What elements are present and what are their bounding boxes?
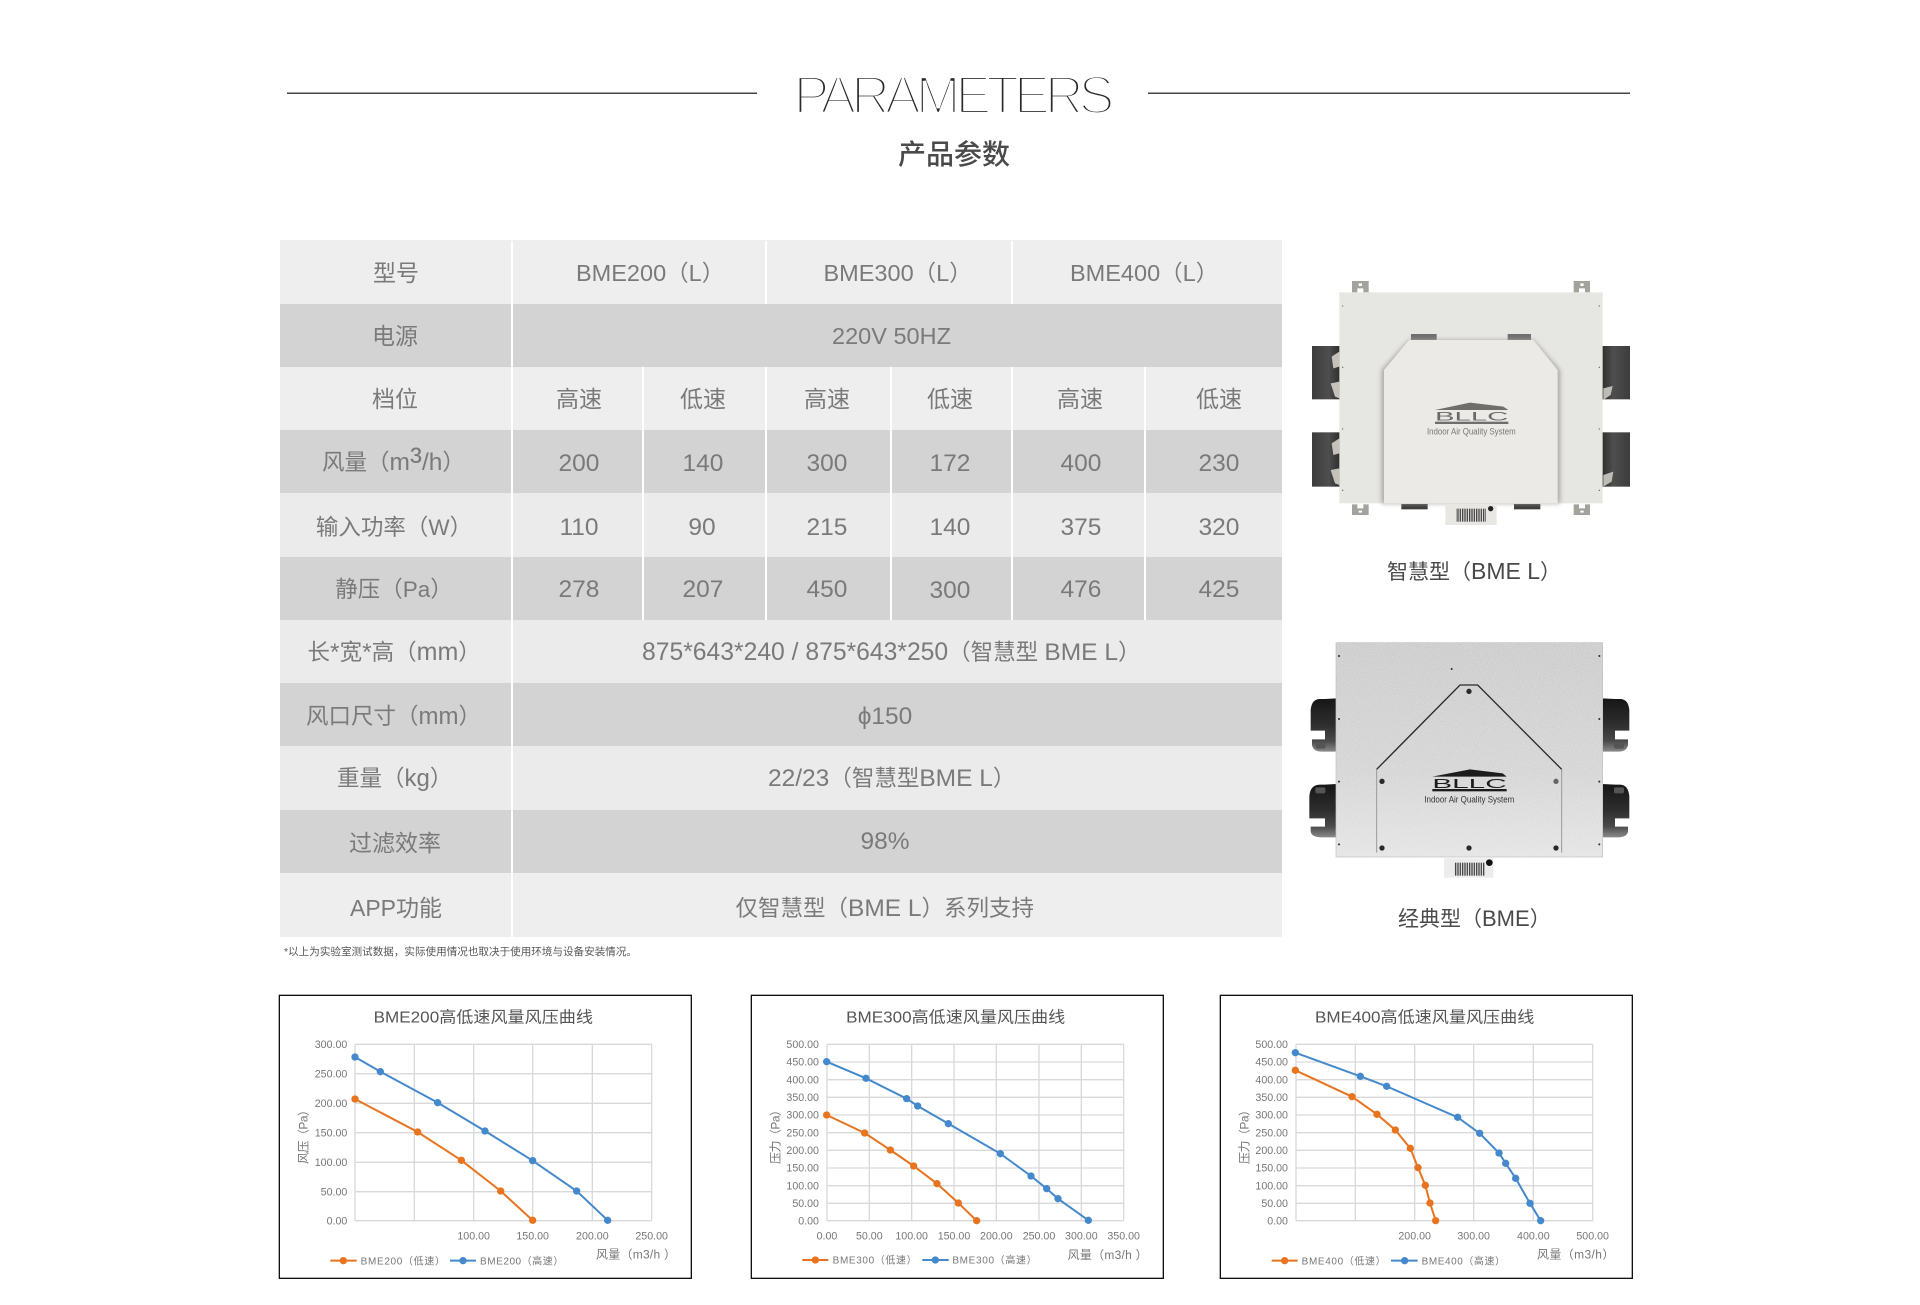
row: speed xyxy=(280,367,1282,430)
front panel xyxy=(1384,340,1558,503)
product image: classic type BME xyxy=(1309,643,1629,878)
y axis labels: 0.00 xyxy=(1267,1215,1288,1227)
x axis labels: 250.00 xyxy=(635,1231,668,1243)
row: dimensions: 875*643*240 / 875*643*250（智慧型 BME L） xyxy=(642,639,1140,666)
row: power: 220V 50HZ xyxy=(832,323,951,349)
y axis title: 风压（Pa） xyxy=(297,1104,311,1164)
row: input power: 110 xyxy=(559,514,599,541)
row: airflow: ） xyxy=(442,450,465,475)
product image: smart type BME L xyxy=(1312,281,1630,525)
x axis labels: 200.00 xyxy=(1398,1231,1431,1243)
y axis labels: 50.00 xyxy=(1261,1198,1288,1210)
row: model: 型号 xyxy=(373,260,419,286)
x axis labels xyxy=(817,1231,1140,1243)
y axis labels: 250.00 xyxy=(315,1068,347,1080)
screws xyxy=(1338,655,1600,851)
frame xyxy=(751,995,1163,1278)
row: airflow: 140 xyxy=(683,450,723,477)
body xyxy=(1339,292,1603,503)
x axis title: 风量（m3/h ） xyxy=(596,1247,676,1261)
logo: BLLC xyxy=(1432,776,1507,791)
row: duct size: 风口尺寸（mm） xyxy=(306,703,481,730)
row: input power: 90 xyxy=(688,514,716,541)
chart: BME200 xyxy=(279,995,691,1278)
subtitle: 产品参数 xyxy=(898,139,1010,170)
row: speed: 高速 xyxy=(1057,386,1103,412)
title rule left xyxy=(287,92,757,94)
legend xyxy=(1272,1254,1505,1267)
row: static pressure: 425 xyxy=(1199,576,1239,603)
row: airflow: ³ xyxy=(410,440,422,481)
legend: BME400（低速） xyxy=(1302,1254,1386,1267)
logo tagline: Indoor Air Quality System xyxy=(1427,427,1516,437)
row: input power: 140 xyxy=(930,514,970,541)
x axis labels: 300.00 xyxy=(1065,1231,1098,1243)
row: input power: 215 xyxy=(807,514,847,541)
chart title: BME300高低速风量风压曲线 xyxy=(846,1008,1065,1026)
row: static pressure: 476 xyxy=(1061,576,1101,603)
y axis labels: 500.00 xyxy=(786,1039,819,1051)
caption: classic type: 经典型（BME） xyxy=(1398,906,1551,931)
row: speed: 高速 xyxy=(804,386,850,412)
legend: BME300（低速） xyxy=(833,1254,917,1267)
y axis labels: 100.00 xyxy=(1255,1180,1288,1192)
x axis labels: 350.00 xyxy=(1107,1231,1140,1243)
series: high speed xyxy=(1292,1049,1544,1224)
body grain xyxy=(1336,643,1603,857)
x axis labels: 150.00 xyxy=(516,1231,549,1243)
x axis labels: 300.00 xyxy=(1457,1231,1490,1243)
x axis labels: 0.00 xyxy=(817,1231,837,1243)
row: speed: 高速 xyxy=(556,386,602,412)
logo xyxy=(1432,769,1507,791)
y axis labels: 300.00 xyxy=(786,1110,819,1122)
logo xyxy=(1435,403,1509,424)
footnote: *以上为实验室测试数据，实际使用情况也取决于使用环境与设备安装情况。 xyxy=(284,945,637,958)
y axis labels: 150.00 xyxy=(1255,1163,1288,1175)
y axis labels: 0.00 xyxy=(798,1215,819,1227)
row: input power: 320 xyxy=(1199,514,1239,541)
series: low speed xyxy=(351,1095,536,1224)
row: airflow: 400 xyxy=(1061,450,1101,477)
panel sides xyxy=(1377,769,1562,853)
y axis title: 压力（Pa） xyxy=(1238,1104,1252,1164)
row: filter efficiency: 过滤效率 xyxy=(349,830,441,856)
ports xyxy=(1312,346,1630,487)
row: static pressure xyxy=(280,557,1282,620)
panel shadow xyxy=(1382,340,1560,503)
y axis labels: 300.00 xyxy=(1255,1110,1288,1122)
x axis labels: 100.00 xyxy=(895,1231,928,1243)
x axis labels: 200.00 xyxy=(980,1231,1013,1243)
x axis labels: 150.00 xyxy=(938,1231,970,1243)
row: input power: 输入功率（W） xyxy=(316,515,472,540)
row: filter efficiency: 98% xyxy=(860,828,910,855)
bottom tabs xyxy=(1401,504,1540,509)
row: duct size: ϕ150 xyxy=(858,703,912,730)
y axis labels: 200.00 xyxy=(315,1098,347,1110)
row: static pressure: 207 xyxy=(683,576,723,603)
rivets xyxy=(1342,305,1600,491)
row: static pressure: 300 xyxy=(930,577,970,604)
grid xyxy=(1296,1044,1593,1221)
body xyxy=(1336,643,1603,857)
y axis labels xyxy=(786,1039,819,1227)
y axis labels: 250.00 xyxy=(1255,1127,1288,1139)
frame xyxy=(279,995,691,1278)
y axis labels: 300.00 xyxy=(315,1039,347,1051)
port slots xyxy=(1315,743,1624,793)
legend xyxy=(802,1254,1037,1267)
row: weight: 22/23（智慧型BME L） xyxy=(768,765,1015,792)
legend: BME400（高速） xyxy=(1422,1254,1505,1267)
row: app function xyxy=(280,873,1282,937)
y axis labels: 450.00 xyxy=(1255,1057,1288,1069)
y axis labels: 400.00 xyxy=(1255,1074,1288,1086)
y axis labels: 450.00 xyxy=(786,1057,819,1069)
row: dimensions xyxy=(280,620,1282,683)
brackets xyxy=(1352,281,1590,515)
row: weight: 重量（kg） xyxy=(337,765,452,792)
logo: BLLC xyxy=(1435,409,1509,423)
x axis labels: 250.00 xyxy=(1023,1231,1055,1243)
y axis labels xyxy=(315,1039,347,1227)
row: airflow: 172 xyxy=(930,450,970,477)
legend: BME200（高速） xyxy=(480,1254,563,1267)
row: speed: 低速 xyxy=(1196,386,1242,412)
y axis labels: 400.00 xyxy=(786,1074,819,1086)
y axis labels xyxy=(1255,1039,1288,1227)
row: airflow xyxy=(280,430,1282,493)
series: low speed xyxy=(1292,1067,1439,1224)
row: airflow: 230 xyxy=(1199,450,1239,477)
row: static pressure: 450 xyxy=(807,576,847,603)
x axis labels: 100.00 xyxy=(457,1231,490,1243)
row: model: BME200（L） xyxy=(576,260,724,286)
legend xyxy=(330,1254,563,1267)
y axis labels: 350.00 xyxy=(1255,1092,1288,1104)
chart title: BME200高低速风量风压曲线 xyxy=(374,1008,593,1026)
row: power xyxy=(280,304,1282,367)
row: model: BME400（L） xyxy=(1070,260,1218,286)
frame xyxy=(1220,995,1632,1278)
row: speed: 低速 xyxy=(927,386,973,412)
row: duct size xyxy=(280,683,1282,746)
y axis labels: 0.00 xyxy=(327,1215,347,1227)
x axis title: 风量（m3/h） xyxy=(1537,1247,1614,1261)
grid xyxy=(355,1044,652,1221)
row: airflow: 300 xyxy=(807,450,847,477)
x axis labels xyxy=(1398,1231,1609,1243)
row: static pressure: 278 xyxy=(559,576,599,603)
x axis labels: 500.00 xyxy=(1576,1231,1609,1243)
x axis labels: 50.00 xyxy=(856,1231,883,1243)
row: airflow: /h xyxy=(422,449,442,476)
row: model: BME300（L） xyxy=(824,260,972,286)
y axis labels: 50.00 xyxy=(792,1198,819,1210)
x axis labels: 200.00 xyxy=(576,1231,609,1243)
row: model xyxy=(280,240,1282,304)
y axis labels: 150.00 xyxy=(786,1163,819,1175)
x axis labels xyxy=(457,1231,668,1243)
row: filter efficiency xyxy=(280,810,1282,873)
y axis labels: 350.00 xyxy=(786,1092,819,1104)
controller box xyxy=(1444,858,1493,878)
y axis labels: 150.00 xyxy=(315,1127,347,1139)
series: high speed xyxy=(351,1053,611,1224)
y axis labels: 50.00 xyxy=(321,1186,347,1198)
row: dimensions: 长*宽*高（mm） xyxy=(308,638,481,666)
x axis labels: 400.00 xyxy=(1517,1231,1550,1243)
row: power: 电源 xyxy=(372,323,418,349)
row: static pressure: 静压（Pa） xyxy=(335,577,453,602)
grid xyxy=(827,1044,1124,1221)
y axis labels: 200.00 xyxy=(1255,1145,1288,1157)
row: input power xyxy=(280,493,1282,557)
legend: BME300（高速） xyxy=(952,1254,1037,1267)
logo tagline: Indoor Air Quality System xyxy=(1424,794,1514,804)
chart: BME300 xyxy=(751,995,1163,1278)
row: input power: 375 xyxy=(1061,514,1101,541)
y axis labels: 100.00 xyxy=(786,1180,819,1192)
row: app function: 仅智慧型（BME L）系列支持 xyxy=(736,895,1034,922)
panel top edge xyxy=(1377,685,1562,769)
title rule right xyxy=(1148,92,1630,94)
y axis labels: 200.00 xyxy=(786,1145,819,1157)
chart title: BME400高低速风量风压曲线 xyxy=(1315,1008,1534,1026)
row: airflow: 风量（m xyxy=(322,449,410,476)
row: airflow: 200 xyxy=(559,450,599,477)
y axis labels: 500.00 xyxy=(1255,1039,1288,1051)
controller box xyxy=(1445,504,1497,525)
ports xyxy=(1309,698,1629,837)
x axis title: 风量（m3/h ） xyxy=(1068,1248,1148,1262)
row: weight xyxy=(280,746,1282,810)
title: PARAMETERS: PARAMETERS xyxy=(794,66,1114,126)
caption: smart type: 智慧型（BME L） xyxy=(1387,558,1561,584)
legend: BME200（低速） xyxy=(361,1254,445,1267)
y axis labels: 100.00 xyxy=(315,1157,347,1169)
y axis title: 压力（Pa） xyxy=(768,1104,782,1164)
row: speed: 档位 xyxy=(372,386,418,412)
row: app function: APP功能 xyxy=(350,895,442,921)
series: low speed xyxy=(823,1111,980,1224)
table: parameters xyxy=(280,240,1282,937)
chart: BME400 xyxy=(1220,995,1632,1278)
top tabs xyxy=(1411,334,1531,341)
row: speed: 低速 xyxy=(680,386,726,412)
y axis labels: 250.00 xyxy=(786,1127,819,1139)
series: high speed xyxy=(823,1058,1092,1224)
